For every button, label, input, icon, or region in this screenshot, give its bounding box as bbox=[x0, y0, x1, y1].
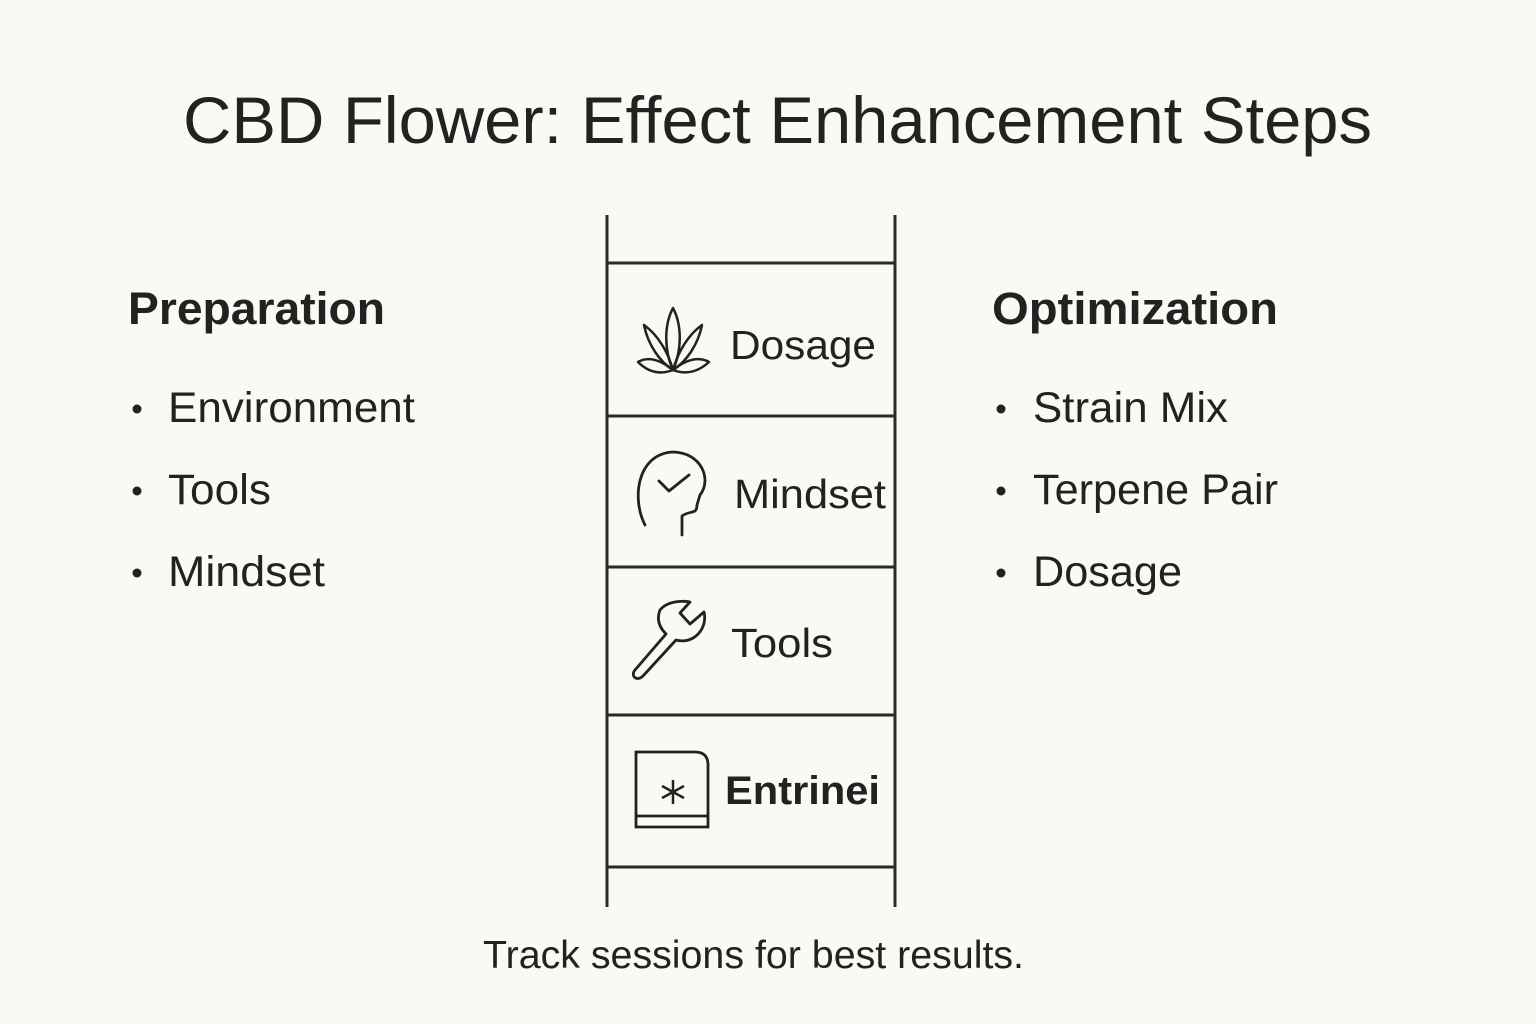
list: optimization items: Terpene Pair bbox=[1033, 466, 1278, 514]
list: preparation items bbox=[132, 384, 415, 596]
list: optimization items: Strain Mix bbox=[1033, 384, 1229, 432]
list: preparation items: Tools bbox=[168, 466, 271, 514]
footer note: Track sessions for best results. bbox=[483, 934, 1024, 977]
label: environment (truncated): Entrinei bbox=[725, 769, 880, 813]
label: mindset: Mindset bbox=[734, 471, 887, 517]
step: tools bbox=[633, 601, 833, 678]
label: dosage: Dosage bbox=[730, 322, 876, 368]
heading: optimization: Optimization bbox=[992, 283, 1278, 334]
icon: cannabis leaf bbox=[638, 308, 709, 372]
list: optimization items bbox=[996, 384, 1278, 596]
step: dosage bbox=[638, 308, 876, 372]
icon: wrench bbox=[633, 601, 705, 678]
icon: window box bbox=[636, 752, 708, 827]
title: CBD Flower: Effect Enhancement Steps bbox=[183, 83, 1372, 157]
panel: optimization bbox=[992, 283, 1278, 596]
icon: head with check bbox=[638, 452, 705, 535]
step: mindset bbox=[638, 452, 887, 535]
label: tools: Tools bbox=[731, 620, 833, 666]
list: optimization items: Dosage bbox=[1033, 548, 1182, 596]
list: preparation items: Mindset bbox=[168, 548, 325, 596]
list: preparation items: Environment bbox=[168, 384, 415, 432]
panel: preparation bbox=[128, 283, 415, 596]
ladder bbox=[607, 215, 895, 907]
step: environment bbox=[636, 752, 880, 827]
heading: preparation: Preparation bbox=[128, 283, 385, 334]
